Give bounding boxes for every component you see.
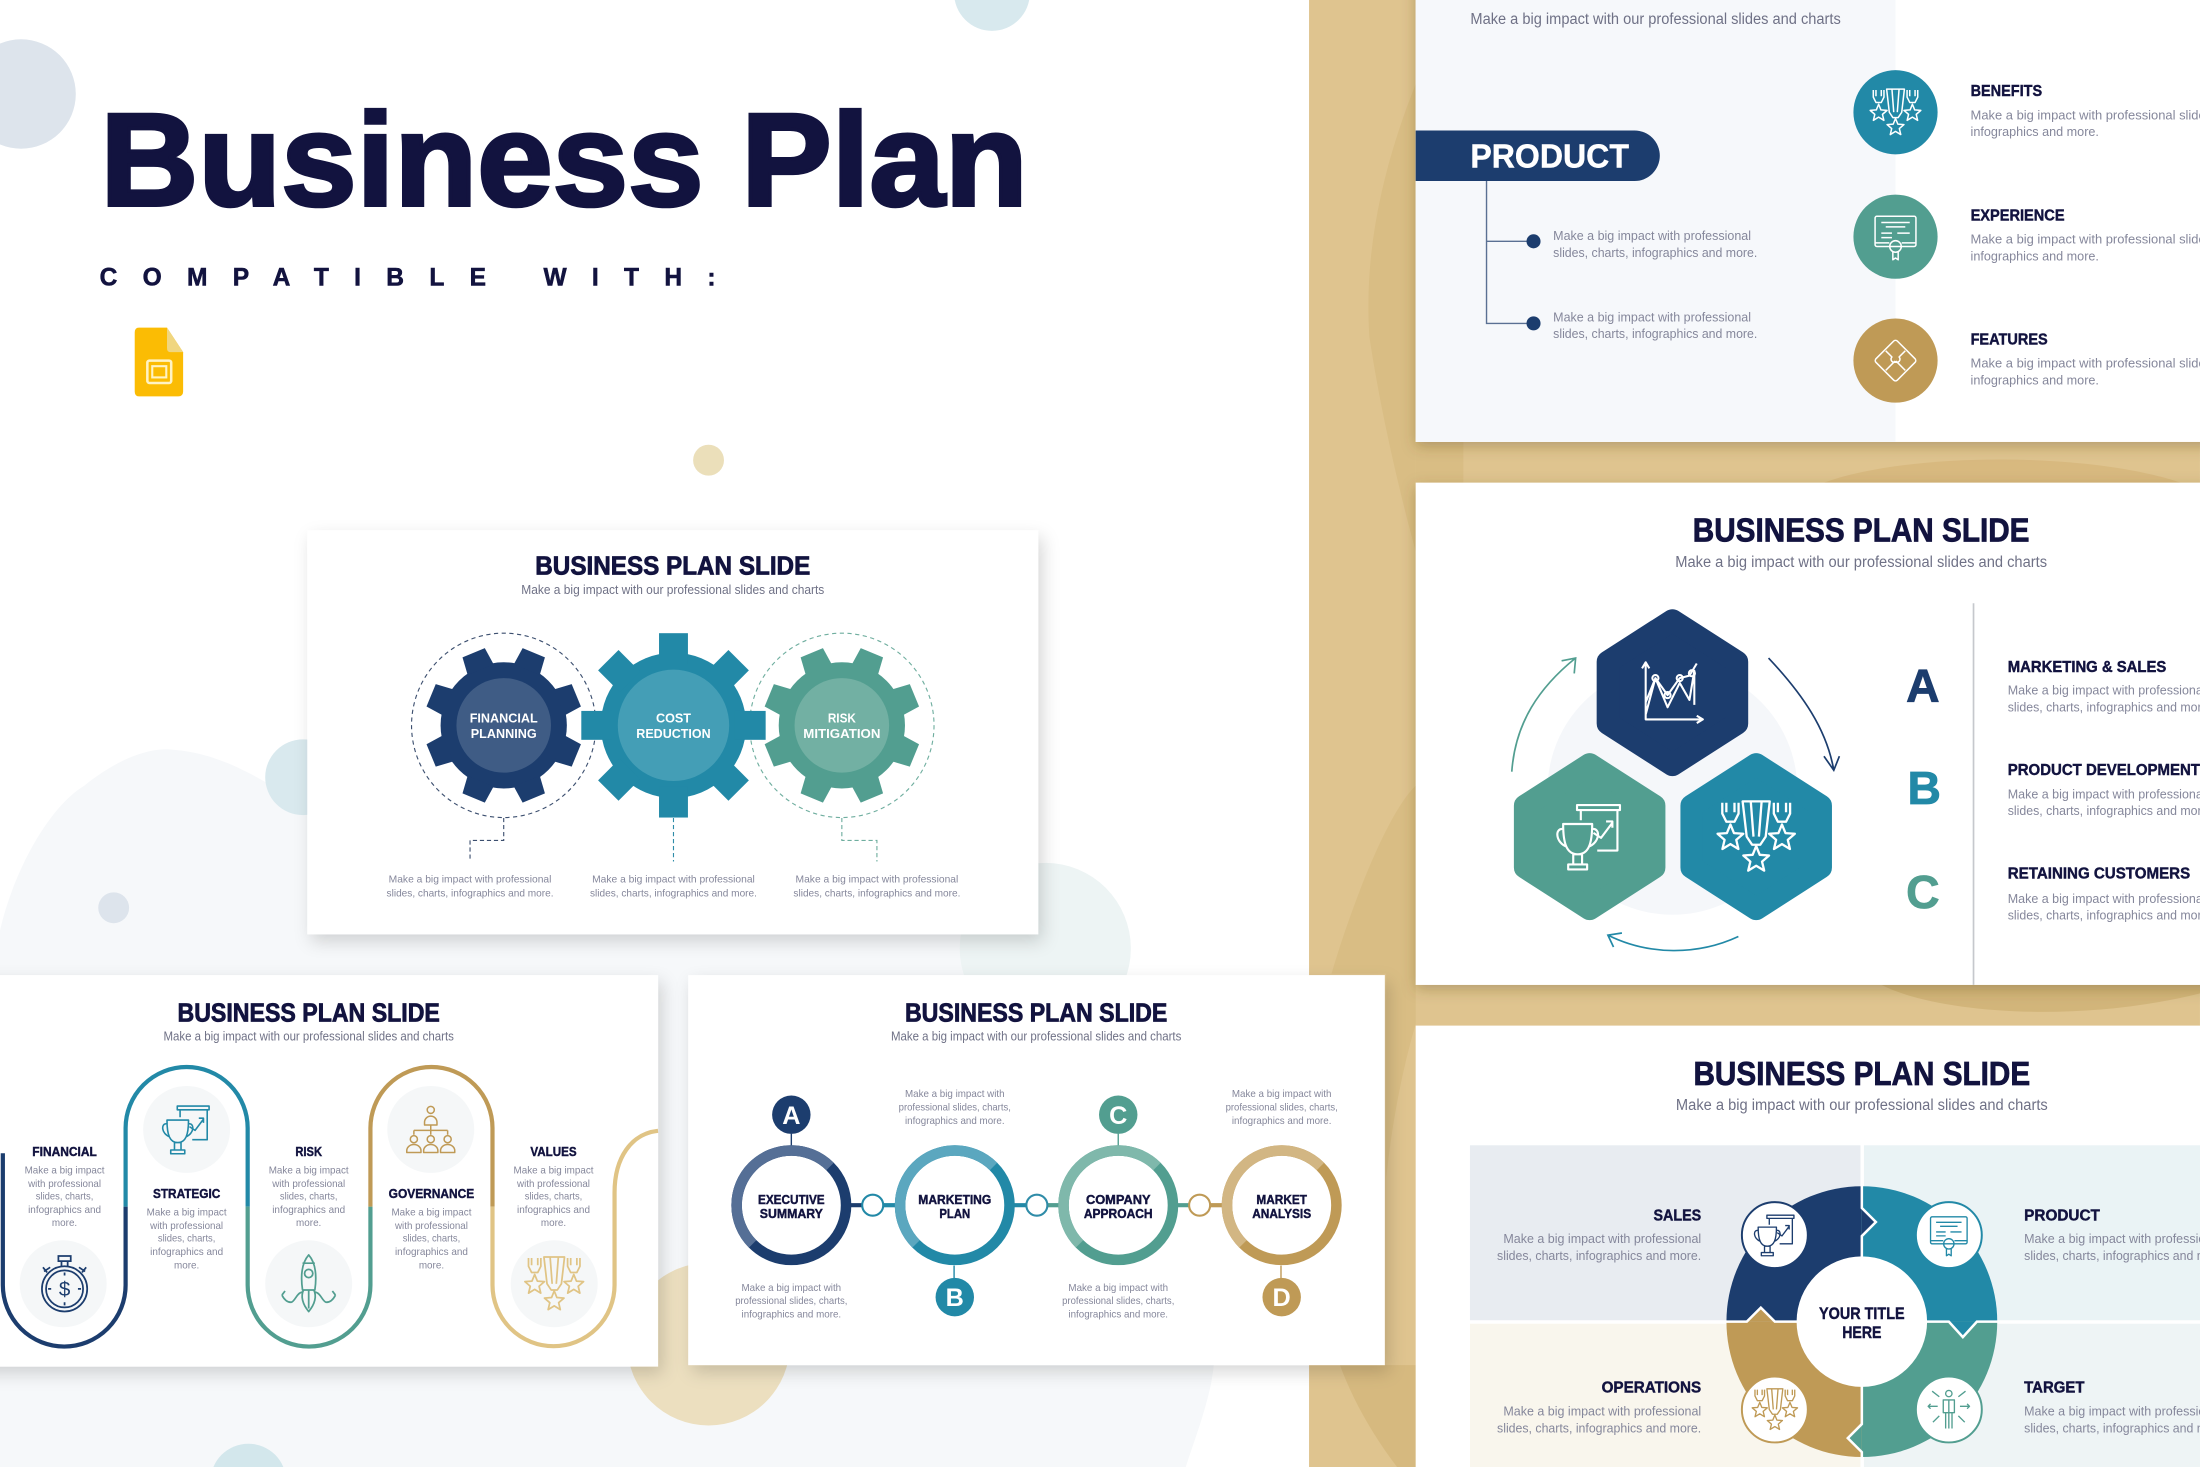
arrow: teal — [1608, 933, 1738, 951]
gear: risk mitigation: RISK — [828, 711, 856, 726]
hexagon: chart — [1608, 620, 1737, 765]
badge B: B — [946, 1284, 964, 1312]
item: sales: Make a big impact with professional — [1503, 1232, 1701, 1246]
item: financial: Make a big impact — [25, 1165, 105, 1177]
icon badge: medals — [1742, 1377, 1808, 1442]
gear captions: slides, charts, infographics and more. — [590, 888, 757, 900]
item: values — [514, 1144, 594, 1229]
item: experience: infographics and more. — [1971, 249, 2099, 263]
item: governance: Make a big impact — [391, 1207, 472, 1219]
ring captions: professional slides, charts, — [1062, 1295, 1174, 1307]
item: features: FEATURES — [1971, 331, 2048, 348]
letter C: C — [1906, 866, 1940, 918]
item: retaining customers: RETAINING CUSTOMERS — [2008, 865, 2190, 882]
ring captions: Make a big impact with — [1232, 1088, 1332, 1100]
item: features — [1853, 318, 2200, 403]
item: values: slides, charts, — [525, 1191, 582, 1203]
badge D — [1262, 1278, 1301, 1316]
item: experience — [1853, 195, 2200, 279]
product bullet text: slides, charts, infographics and more. — [1553, 327, 1757, 341]
ring: market analysis — [1227, 1150, 1336, 1260]
item: values: more. — [541, 1217, 566, 1229]
panel: gears slide — [307, 530, 1038, 934]
item: sales — [1497, 1208, 1701, 1263]
gear captions — [387, 874, 960, 900]
item: strategic: slides, charts, — [158, 1233, 215, 1245]
ring: company approach: COMPANY — [1086, 1193, 1151, 1207]
item: financial: with professional — [27, 1178, 101, 1190]
item: risk: infographics and — [272, 1204, 345, 1216]
heading: BUSINESS PLAN SLIDE — [1693, 512, 2030, 549]
item: operations — [1497, 1379, 1701, 1435]
badge B — [936, 1278, 974, 1316]
ring captions: professional slides, charts, — [1226, 1101, 1338, 1113]
item: risk: more. — [296, 1217, 321, 1229]
item: experience: EXPERIENCE — [1971, 207, 2065, 224]
ring captions: infographics and more. — [1068, 1308, 1168, 1320]
background: tan right panel — [1309, 0, 2200, 1467]
panel: snake timeline slide — [0, 975, 658, 1367]
item: strategic: infographics and — [150, 1246, 223, 1258]
gear: cost reduction: COST — [656, 711, 691, 726]
item: financial: FINANCIAL — [32, 1144, 97, 1159]
badge A — [772, 1095, 811, 1134]
item: strategic: more. — [174, 1259, 199, 1271]
item: financial: slides, charts, — [36, 1191, 93, 1203]
icon: stopwatch — [41, 1255, 88, 1312]
decorative circles — [0, 0, 1131, 1467]
letter A: A — [1906, 660, 1940, 712]
ring: executive summary: EXECUTIVE — [758, 1193, 825, 1207]
item: strategic: STRATEGIC — [153, 1186, 221, 1201]
quadrant backgrounds — [1470, 1145, 2200, 1467]
ring: marketing plan: MARKETING — [918, 1193, 991, 1207]
item: benefits: infographics and more. — [1971, 125, 2099, 139]
letter B: B — [1908, 762, 1941, 814]
centre circle: YOUR TITLE — [1819, 1304, 1905, 1323]
item: operations: slides, charts, infographics and more. — [1497, 1421, 1701, 1435]
item: marketing and sales: MARKETING & SALES — [2008, 659, 2166, 676]
ring: company approach: APPROACH — [1084, 1207, 1153, 1221]
item: product development: PRODUCT DEVELOPMENT — [2008, 762, 2200, 779]
heading: BUSINESS PLAN SLIDE — [1693, 1055, 2030, 1092]
item: values: VALUES — [530, 1144, 577, 1159]
ring: marketing plan: PLAN — [939, 1207, 970, 1221]
subheading: Make a big impact with our professional slides and charts — [1676, 1096, 2048, 1114]
ring captions: professional slides, charts, — [735, 1295, 847, 1307]
icon badge: target person — [1916, 1377, 1982, 1442]
item: governance: infographics and — [395, 1246, 468, 1258]
pale disc — [1548, 665, 1797, 915]
donut — [1726, 1186, 1998, 1458]
ring captions: infographics and more. — [1232, 1115, 1331, 1127]
subtitle: compatible with: COMPATIBLE WITH: — [100, 265, 716, 292]
icon: Google Slides file — [135, 328, 183, 396]
item: risk: RISK — [295, 1144, 322, 1159]
ring captions: professional slides, charts, — [899, 1101, 1011, 1113]
item: governance: with professional — [394, 1220, 468, 1232]
icon: rocket — [281, 1254, 336, 1312]
ring captions: Make a big impact with — [905, 1088, 1005, 1100]
icon: trophy — [162, 1105, 210, 1154]
gear captions: Make a big impact with professional — [592, 874, 755, 886]
serpentine line — [3, 1067, 658, 1347]
title: Business Plan — [100, 86, 1028, 233]
product pill: PRODUCT — [1470, 139, 1629, 176]
gear: cost reduction: REDUCTION — [636, 726, 711, 741]
panel: ring chain slide — [688, 975, 1385, 1365]
item: governance: more. — [419, 1259, 444, 1271]
ring: market analysis: ANALYSIS — [1252, 1207, 1311, 1221]
ring: company approach — [1064, 1150, 1173, 1260]
item: marketing and sales — [2008, 659, 2200, 714]
item: features: infographics and more. — [1971, 373, 2099, 387]
item: sales: slides, charts, infographics and more. — [1497, 1249, 1701, 1263]
item: financial: infographics and — [28, 1204, 101, 1216]
item: target — [2024, 1379, 2200, 1435]
badge C: C — [1109, 1102, 1127, 1130]
subheading: Make a big impact with our professional slides and charts — [521, 583, 824, 597]
tree connector — [1487, 181, 1541, 330]
heading: BUSINESS PLAN SLIDE — [535, 553, 810, 581]
background: left white panel — [0, 0, 1309, 1467]
ring: marketing plan — [900, 1150, 1010, 1260]
gear captions: Make a big impact with professional — [796, 874, 958, 886]
item: operations: OPERATIONS — [1602, 1379, 1701, 1396]
item: financial — [25, 1144, 105, 1229]
icon badge: certificate — [1916, 1202, 1982, 1268]
ring: executive summary — [737, 1150, 846, 1260]
item: governance: slides, charts, — [403, 1233, 460, 1245]
item: values: Make a big impact — [514, 1165, 594, 1177]
item: strategic: Make a big impact — [147, 1207, 227, 1219]
subheading: Make a big impact with our professional slides and charts — [163, 1029, 454, 1043]
item: product: PRODUCT — [2024, 1208, 2100, 1225]
subheading: Make a big impact with our professional slides and charts — [891, 1029, 1181, 1043]
subheading: Make a big impact with our professional slides and charts — [1470, 10, 1841, 28]
background: pale blob — [0, 749, 1216, 1467]
panel: quadrant donut slide — [1416, 1026, 2200, 1467]
gear captions: slides, charts, infographics and more. — [387, 888, 554, 900]
icon circles — [20, 1086, 598, 1327]
item: benefits: BENEFITS — [1971, 83, 2042, 100]
item: target: TARGET — [2024, 1379, 2085, 1396]
gear: risk mitigation: MITIGATION — [803, 726, 880, 741]
ring captions: infographics and more. — [905, 1115, 1005, 1127]
item: governance: GOVERNANCE — [389, 1186, 474, 1201]
gear captions: Make a big impact with professional — [389, 874, 551, 886]
dashed connectors — [470, 818, 877, 861]
dashed ring left — [412, 633, 596, 818]
item: strategic: with professional — [149, 1220, 223, 1232]
link circles — [862, 1195, 1210, 1216]
ring captions — [735, 1088, 1338, 1320]
item: values: infographics and — [517, 1204, 590, 1216]
ring captions: Make a big impact with — [742, 1282, 841, 1294]
item: retaining customers — [2008, 865, 2200, 923]
gear: financial planning: PLANNING — [471, 726, 537, 741]
item: benefits — [1853, 70, 2200, 154]
badge A: A — [782, 1102, 800, 1130]
gear captions: slides, charts, infographics and more. — [793, 888, 960, 900]
ring captions: infographics and more. — [742, 1308, 841, 1320]
product pill — [1416, 130, 1660, 181]
item: product — [2024, 1208, 2200, 1263]
panel: product slide — [1416, 0, 2200, 442]
centre circle: HERE — [1842, 1323, 1881, 1342]
ring: executive summary: SUMMARY — [760, 1207, 823, 1221]
hexagon: trophy — [1525, 764, 1654, 909]
panel: hexagon slide — [1416, 483, 2200, 985]
item: financial: more. — [52, 1217, 77, 1229]
ring: market analysis: MARKET — [1256, 1193, 1307, 1207]
gear: risk mitigation — [764, 647, 920, 803]
product bullet text — [1553, 229, 1757, 341]
gear: cost reduction — [581, 633, 766, 818]
item: sales: SALES — [1653, 1208, 1701, 1225]
arrow: green — [1512, 658, 1576, 772]
item: operations: Make a big impact with professional — [1503, 1405, 1701, 1419]
dashed ring right — [750, 633, 934, 818]
item: risk: Make a big impact — [269, 1165, 349, 1177]
item: risk — [269, 1144, 349, 1229]
badge D: D — [1273, 1284, 1291, 1312]
icon badge: trophy — [1742, 1202, 1808, 1268]
product bullet text: Make a big impact with professional — [1553, 310, 1751, 324]
hexagon: medals — [1692, 764, 1821, 909]
product bullet text: slides, charts, infographics and more. — [1553, 246, 1757, 260]
item: risk: with professional — [271, 1178, 345, 1190]
arrow: navy — [1769, 658, 1839, 770]
gear: financial planning: FINANCIAL — [470, 711, 538, 726]
heading: BUSINESS PLAN SLIDE — [905, 999, 1167, 1027]
product bullet text: Make a big impact with professional — [1553, 229, 1751, 243]
item: product development — [2008, 762, 2200, 818]
vertical divider — [1973, 603, 1975, 985]
gear: financial planning — [426, 647, 582, 803]
centre circle — [1797, 1256, 1927, 1387]
ring captions: Make a big impact with — [1068, 1282, 1168, 1294]
icon: organisation — [406, 1106, 456, 1154]
item: risk: slides, charts, — [280, 1191, 337, 1203]
chain links — [791, 1134, 1281, 1278]
icon: medals — [524, 1256, 584, 1310]
item: strategic — [147, 1186, 227, 1271]
item: governance — [389, 1186, 474, 1271]
badge C — [1099, 1095, 1137, 1134]
item: values: with professional — [516, 1178, 590, 1190]
subheading: Make a big impact with our professional slides and charts — [1675, 553, 2047, 571]
heading: BUSINESS PLAN SLIDE — [178, 999, 440, 1027]
